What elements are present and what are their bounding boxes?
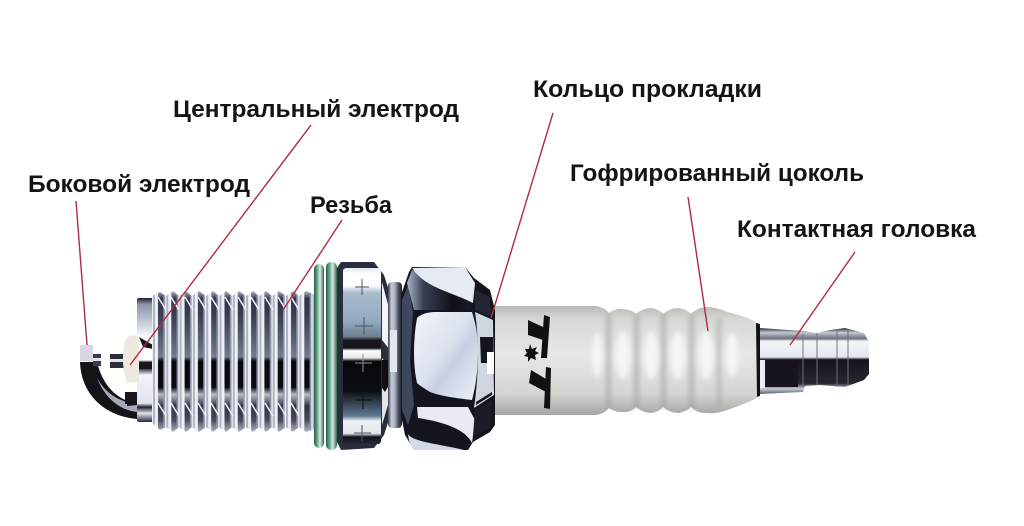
- side electrode: [80, 345, 137, 419]
- label: contact head: Контактная головка: [737, 216, 977, 243]
- nut body: [401, 267, 495, 450]
- top face: [412, 267, 475, 303]
- right side facets: [475, 290, 492, 317]
- gasket washer: [388, 282, 402, 428]
- left strip: [402, 285, 414, 425]
- label: ribbed insulator: Гофрированный цоколь: [570, 160, 864, 187]
- top wedge: [407, 270, 472, 310]
- line: gasket ring: [491, 113, 553, 318]
- thread crest diagonals: [158, 297, 299, 416]
- label: gasket ring: Кольцо прокладки: [533, 76, 762, 103]
- rib highlights: [592, 331, 738, 379]
- thread: [152, 291, 318, 432]
- rib shading: [606, 314, 721, 408]
- ribbed ceramic insulator: [495, 306, 757, 415]
- label: side electrode: Боковой электрод: [28, 171, 250, 198]
- insulator logo: [524, 315, 551, 409]
- line: ribbed insulator: [688, 197, 708, 331]
- centre face: [414, 312, 478, 400]
- central electrode and insulator tip: [110, 335, 153, 404]
- label: central electrode: Центральный электрод: [173, 96, 459, 123]
- contact head: [753, 322, 869, 398]
- metal collar: [337, 262, 392, 450]
- bottom face: [417, 407, 475, 443]
- green sealing ring: [314, 262, 337, 450]
- bottom light facet: [408, 434, 464, 450]
- line: contact head: [790, 252, 855, 345]
- line: side electrode: [76, 201, 87, 345]
- label: thread: Резьба: [310, 192, 393, 219]
- threaded shell base: [137, 298, 155, 422]
- spark plug illustration: [80, 262, 869, 450]
- collar cross marks: [354, 279, 373, 441]
- hex nut: [401, 267, 495, 450]
- line: central electrode: [130, 125, 311, 365]
- pointer lines: [76, 113, 855, 365]
- line: thread: [283, 220, 342, 310]
